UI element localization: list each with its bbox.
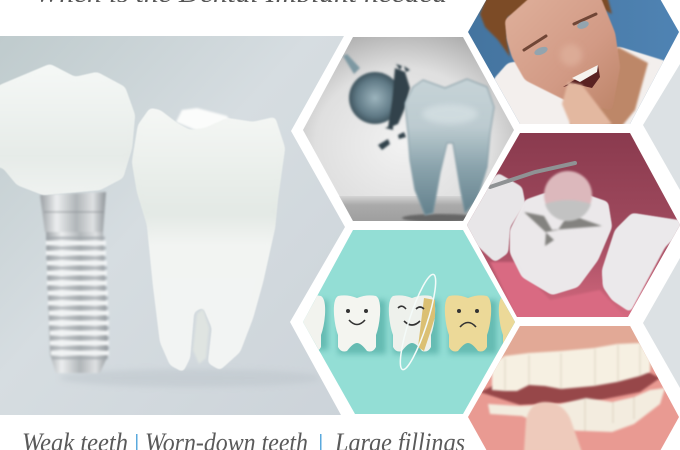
wrecking ball bbox=[343, 54, 410, 150]
smiling white tooth bbox=[334, 295, 380, 352]
lower teeth bbox=[488, 388, 665, 432]
left partial tooth bbox=[303, 296, 326, 350]
mouth interior bbox=[480, 368, 660, 405]
pink gum bbox=[490, 262, 625, 317]
shirt bbox=[493, 47, 668, 126]
eyes and brows bbox=[524, 14, 596, 50]
sad yellow tooth bbox=[445, 295, 491, 352]
upper teeth bbox=[492, 343, 650, 391]
mouth bbox=[563, 65, 600, 88]
upper lip and gum bbox=[488, 324, 655, 372]
left tooth bbox=[467, 174, 526, 262]
finger bbox=[562, 82, 612, 128]
floor bbox=[339, 196, 476, 221]
tooth highlight bbox=[422, 104, 478, 124]
sparkle ring bbox=[400, 274, 436, 370]
natural tooth bbox=[132, 108, 285, 372]
panel: chipped front teeth bbox=[465, 324, 680, 450]
center tooth bbox=[510, 193, 612, 295]
implant crown bbox=[0, 64, 135, 195]
finger bbox=[524, 402, 582, 450]
filling piece bbox=[544, 171, 592, 221]
panel: happy and stained teeth on teal bbox=[303, 230, 515, 414]
right partial tooth bbox=[498, 298, 515, 343]
steel tooth bbox=[405, 79, 494, 215]
dental instrument bbox=[490, 163, 575, 187]
floor shadow bbox=[68, 370, 302, 386]
right gray panel lower bbox=[643, 258, 680, 388]
right gray panel upper bbox=[643, 64, 680, 190]
implant screw bbox=[40, 192, 109, 373]
caption bbox=[22, 428, 465, 450]
hair bbox=[480, 0, 612, 57]
panel: implant and natural tooth photo bbox=[0, 36, 346, 416]
face bbox=[505, 0, 620, 110]
right tooth bbox=[602, 213, 680, 312]
cavity bbox=[524, 212, 602, 246]
panel: wrecking ball hitting a tooth bbox=[300, 36, 516, 222]
half-cleaned tooth bbox=[389, 295, 435, 352]
panel: tooth filling bbox=[455, 132, 680, 318]
neck bbox=[570, 47, 648, 126]
panel: man in tooth pain bbox=[465, 0, 680, 128]
nose bbox=[561, 45, 582, 66]
tooth shadows bbox=[312, 300, 519, 354]
